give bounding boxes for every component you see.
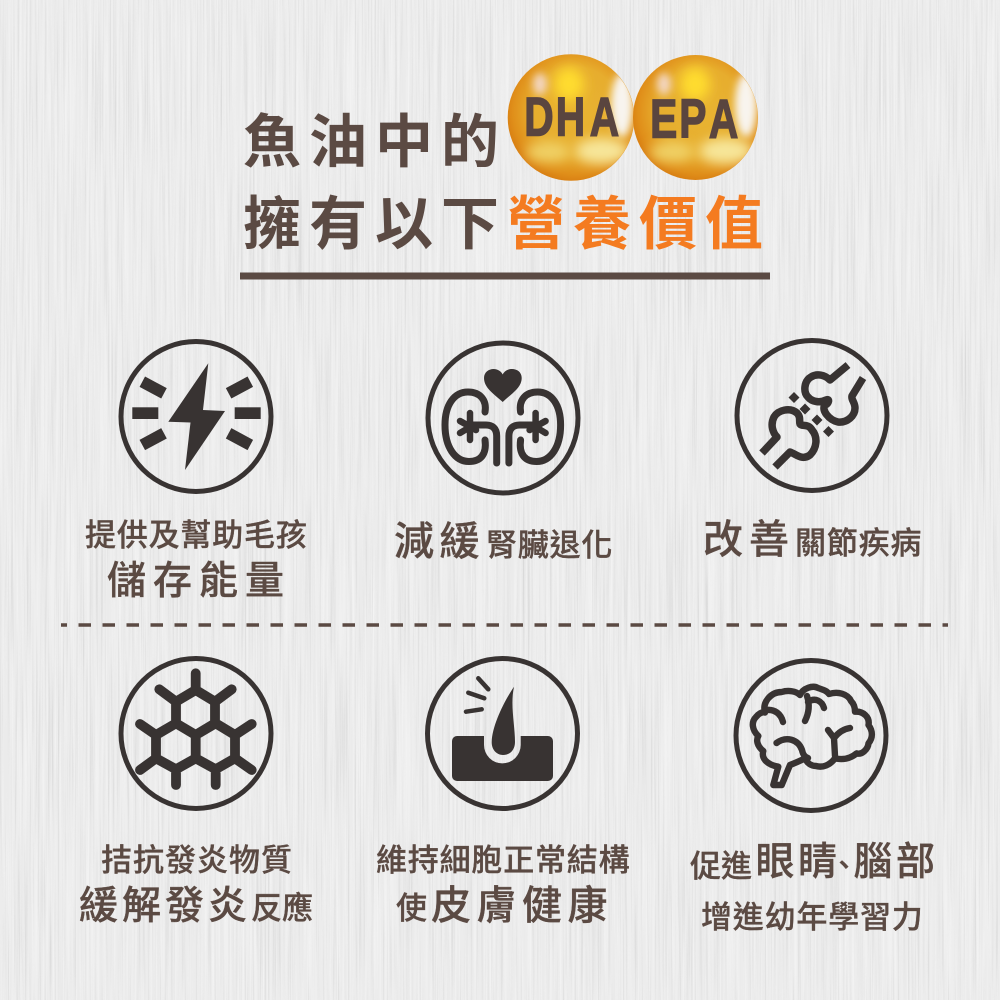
label: eyes and brain: 、 [830,850,858,881]
badge: EPA oil capsule: EPA [650,88,738,150]
label: joints: 關節疾病 [795,526,922,561]
badge: DHA oil capsule [508,54,634,181]
label: kidney [394,520,613,564]
icon: energy bolt [121,342,271,492]
icon: molecule [121,658,271,808]
label: joints: 改善 [703,518,795,562]
label: energy storage [85,518,308,603]
badge: DHA oil capsule: DHA [524,87,619,148]
label: anti-inflammatory: 拮抗發炎物質 [101,843,293,878]
divider dashed line [61,623,948,627]
label: kidney: 腎臟退化 [486,528,613,563]
title line 2 dark part: 擁有以下 [243,192,507,257]
label: skin health: 皮膚健康 [431,884,613,928]
icon: joint bones [737,340,887,490]
label: anti-inflammatory: 反應 [251,891,313,926]
label: eyes and brain [690,841,939,935]
label: eyes and brain: 眼睛 [756,841,841,884]
label: eyes and brain: 增進幼年學習力 [701,900,924,935]
title line 1: 魚油中的 [243,110,507,175]
icon: brain [736,660,886,810]
label: skin health: 使 [396,891,427,926]
icon: kidneys and heart [428,343,578,493]
label: anti-inflammatory [79,843,313,928]
label: kidney: 減緩 [394,520,485,564]
label: anti-inflammatory: 緩解發炎 [79,885,251,928]
label: eyes and brain: 腦部 [854,841,939,884]
label: energy storage: 提供及幫助毛孩 [85,518,308,553]
title [243,110,771,257]
label: joints [703,518,922,562]
icon: skin and hair [428,658,578,808]
title underline [240,272,770,280]
badge: EPA oil capsule [633,55,758,180]
label: energy storage: 儲存能量 [107,560,291,603]
label: skin health [376,843,630,928]
title line 2 highlight: 營養價值 [507,192,771,257]
label: skin health: 維持細胞正常結構 [376,843,630,878]
label: eyes and brain: 促進 [690,849,752,884]
